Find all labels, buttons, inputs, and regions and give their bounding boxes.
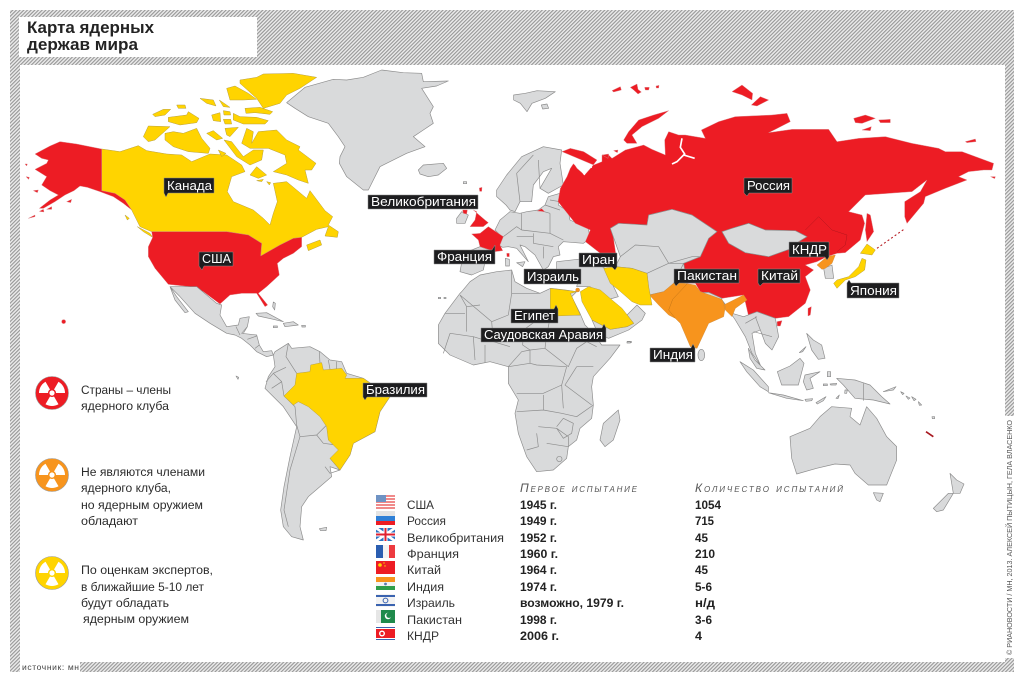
Iceland — [418, 163, 447, 177]
title: держав мира — [27, 36, 139, 54]
Falkland Islands — [319, 527, 327, 531]
row: Китай — [407, 563, 708, 577]
label: Израиль: Израиль — [527, 269, 579, 284]
New Guinea — [837, 378, 890, 404]
label: Великобритания: Великобритания — [371, 194, 476, 209]
label: Индия: Индия — [653, 347, 693, 362]
row: Россия: Россия — [407, 514, 446, 528]
Canary and Socotra islands — [438, 297, 631, 343]
Australia — [790, 407, 897, 485]
table headers: Первое испытание — [520, 481, 638, 495]
Russian islands — [602, 84, 995, 326]
Kaliningrad — [537, 209, 545, 212]
row: Франция — [407, 547, 715, 561]
legend item: expected within 5-10 years: в ближайшие 5-10 лет — [81, 580, 204, 594]
label: Франция: Франция — [437, 249, 492, 264]
map: Central and South America — [170, 287, 390, 540]
United Kingdom — [463, 187, 488, 227]
Saudi Arabia — [580, 287, 634, 329]
Pacific islands — [883, 387, 935, 419]
map: North America — [25, 70, 448, 324]
icon: orange radiation symbol — [36, 458, 68, 492]
row: Израиль — [407, 596, 715, 610]
title — [19, 17, 257, 57]
legend item: non-members with nuclear weapons: но ядерным оружием — [81, 498, 203, 512]
row: Индия: 1974 г. — [520, 580, 557, 594]
Ireland — [457, 212, 468, 223]
map: Africa — [438, 270, 631, 472]
row: Великобритания: 45 — [695, 531, 708, 545]
row: КНДР: 2006 г. — [520, 629, 559, 643]
Middle East — [557, 258, 618, 300]
row: Россия: 715 — [695, 514, 714, 528]
Russia and China — [558, 113, 994, 318]
row: Индия — [407, 580, 712, 594]
label: КНДР: КНДР — [792, 242, 827, 257]
row: Франция: 1960 г. — [520, 547, 558, 561]
table: nuclear tests — [376, 481, 843, 643]
North Korea — [817, 255, 835, 269]
Mediterranean islands — [463, 182, 525, 267]
legend — [36, 376, 213, 626]
label: Япония: Япония — [850, 283, 897, 298]
Africa landmass — [438, 270, 620, 472]
legend item: expected within 5-10 years: будут обладать — [81, 596, 169, 610]
map: Oceania — [740, 333, 964, 512]
legend item: expected within 5-10 years: По оценкам экспертов, — [81, 563, 213, 577]
Sri Lanka — [698, 349, 705, 361]
Iberia — [460, 247, 495, 275]
Nepal — [699, 292, 722, 302]
legend item: nuclear club members: Страны – члены — [81, 383, 171, 397]
Central Asia — [610, 209, 717, 295]
credit — [1003, 416, 1016, 658]
flag: USA — [376, 495, 395, 509]
label: Иран — [579, 252, 617, 270]
row: США — [407, 498, 721, 512]
credit: © РИАНОВОСТИ / МН, 2013. АЛЕКСЕЙ ПЫТИЦЫН, ГЕЛА ВЛАСЕНКО — [1005, 420, 1014, 655]
row: Пакистан — [407, 613, 712, 627]
Southeast Asia — [722, 300, 779, 365]
flag: Pakistan — [376, 610, 395, 623]
South Korea — [824, 265, 834, 278]
Svalbard — [514, 91, 555, 112]
row: США: США — [407, 498, 435, 512]
Mexico and Central America — [170, 287, 273, 357]
Israel — [576, 288, 580, 292]
legend item: nuclear club members — [36, 376, 171, 413]
row: Великобритания — [407, 531, 708, 545]
row: Израиль: возможно, 1979 г. — [520, 596, 624, 610]
label: Канада — [164, 178, 214, 197]
Egypt — [550, 288, 580, 316]
label: Канада: Канада — [167, 178, 213, 193]
row: Франция: Франция — [407, 547, 459, 561]
table headers — [520, 481, 843, 495]
row: Израиль: н/д — [695, 596, 715, 610]
icon: yellow radiation symbol — [36, 556, 68, 590]
Greenland — [287, 70, 448, 190]
flag: India — [376, 577, 395, 590]
Madagascar — [600, 410, 620, 447]
row: Индия: 5-6 — [695, 580, 712, 594]
New Zealand — [933, 473, 964, 512]
France — [472, 227, 509, 257]
USA — [25, 142, 302, 324]
Canada — [102, 73, 338, 256]
row: Великобритания: Великобритания — [407, 531, 504, 545]
row: Китай: 45 — [695, 563, 708, 577]
legend item: non-members with nuclear weapons: Не являются членами — [81, 465, 205, 479]
Galapagos — [236, 376, 239, 379]
row: Китай: Китай — [407, 563, 441, 577]
label: США — [199, 251, 233, 270]
title: Карта ядерных — [27, 19, 155, 37]
mainland Europe — [495, 193, 590, 270]
row: КНДР — [407, 629, 702, 643]
legend item: expected within 5-10 years — [36, 556, 213, 626]
icon: red radiation symbol — [36, 376, 68, 410]
label: Саудовская Аравия: Саудовская Аравия — [484, 327, 603, 342]
Tasmania — [873, 493, 883, 502]
label: США: США — [202, 251, 231, 266]
Iran — [604, 267, 652, 305]
row: Великобритания: 1952 г. — [520, 531, 557, 545]
label: Бразилия: Бразилия — [366, 382, 425, 397]
Mongolia — [722, 223, 807, 257]
row: Пакистан: Пакистан — [407, 613, 462, 627]
legend item: non-members with nuclear weapons: обладают — [81, 514, 138, 528]
Brazil — [284, 363, 390, 470]
row: Россия: 1949 г. — [520, 514, 557, 528]
map: Europe — [457, 147, 618, 300]
row: Россия — [407, 514, 714, 528]
label: Китай — [758, 268, 800, 286]
Pakistan and India — [649, 282, 747, 348]
label: Франция — [434, 245, 495, 264]
legend item: non-members with nuclear weapons: ядерного клуба, — [81, 481, 171, 495]
flag: UK — [376, 528, 395, 541]
flag: Israel — [376, 594, 395, 607]
row: Франция: 210 — [695, 547, 715, 561]
row: США: 1945 г. — [520, 498, 557, 512]
row: Пакистан: 1998 г. — [520, 613, 557, 627]
legend item: nuclear club members: ядерного клуба — [81, 399, 169, 413]
label: Россия: Россия — [747, 178, 790, 193]
legend item: expected within 5-10 years: ядерным оружием — [83, 612, 189, 626]
New Caledonia — [926, 432, 933, 437]
row: Индия: Индия — [407, 580, 444, 594]
Caribbean islands — [256, 302, 305, 328]
label: Китай: Китай — [761, 268, 798, 283]
row: КНДР: 4 — [695, 629, 702, 643]
table headers: Количество испытаний — [695, 481, 843, 495]
Japan — [834, 244, 875, 288]
map: Asia — [514, 84, 995, 365]
row: КНДР: КНДР — [407, 629, 439, 643]
flag: North Korea — [376, 627, 395, 640]
label: Пакистан: Пакистан — [677, 268, 737, 283]
flag: Russia — [376, 511, 395, 525]
flag: China — [376, 561, 395, 574]
row: Пакистан: 3-6 — [695, 613, 712, 627]
Indonesia and Philippines — [740, 333, 847, 404]
source note: источник: мн — [22, 662, 79, 672]
row: Израиль: Израиль — [407, 596, 455, 610]
Arabian Peninsula south — [592, 305, 645, 338]
label: Иран: Иран — [582, 252, 615, 267]
legend item: non-members with nuclear weapons — [36, 458, 205, 528]
flag: France — [376, 545, 395, 558]
Scandinavia — [497, 147, 563, 212]
South America — [265, 343, 390, 540]
row: США: 1054 — [695, 498, 721, 512]
world map — [25, 70, 995, 540]
label: Египет: Египет — [514, 308, 555, 323]
row: Китай: 1964 г. — [520, 563, 557, 577]
